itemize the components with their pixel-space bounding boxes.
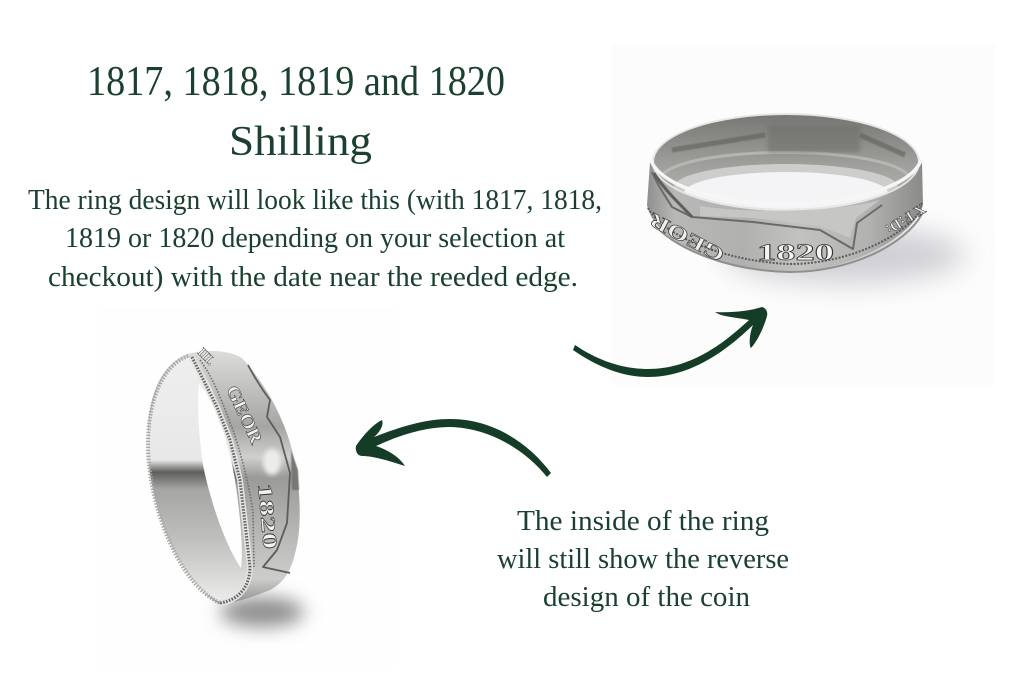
ring lettering FD: X F:D: [882,200,928,237]
text block: inside of the ring note: design of the coin [543,582,750,613]
ring lettering GEOR: GEOR [222,382,267,448]
ring shadow [220,597,304,627]
title [87,59,505,165]
infographic canvas [28,66,974,640]
ring lettering III: III. [195,345,219,368]
title: Shilling [229,119,372,165]
arrow: pointing to top right ring [573,307,767,377]
title: 1817, 1818, 1819 and 1820 [87,59,505,105]
ring lettering GEOR: GEOR [645,208,728,266]
ring shadow [725,227,965,283]
icon: coin ring showing 1820 date [645,113,928,272]
text block: ring design description: The ring design will look like this (with 1817, 1818, [28,185,602,216]
text block: ring design description: checkout) with the date near the reeded edge. [48,262,578,293]
text block: inside of the ring note [497,506,789,613]
text block: inside of the ring note: The inside of the ring [517,506,769,537]
ring date 1820: 1820 [757,240,834,265]
text block: ring design description: 1819 or 1820 depending on your selection at [65,223,565,254]
panel: bottom left ring photo [98,308,397,667]
arrow: pointing to bottom left ring [356,419,551,477]
icon: coin ring standing upright [148,345,300,604]
text block: ring design description [28,185,602,293]
ring date 1820: 1820 [253,483,281,550]
text block: inside of the ring note: will still show the reverse [497,544,789,575]
panel: top right ring photo [647,113,974,299]
